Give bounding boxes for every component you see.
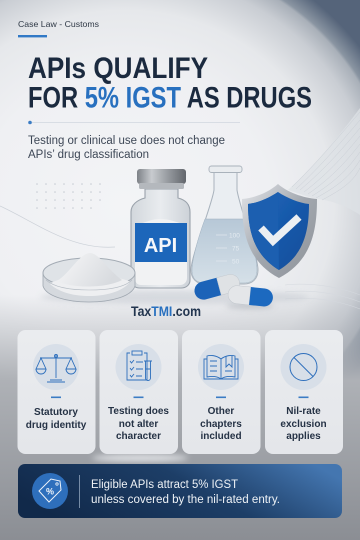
panel: statutory drug identity: Statutory	[34, 407, 78, 418]
panel: nil-rate exclusion applies: Nil-rate	[286, 406, 321, 417]
flask with liquid	[191, 166, 258, 284]
callout text	[91, 479, 280, 506]
panel: nil-rate exclusion applies: exclusion	[280, 419, 327, 430]
category tag	[18, 19, 99, 37]
brand: TaxTMI.com: TaxTMI.com	[131, 304, 201, 319]
panel: testing does not alter character: Testing does	[108, 406, 169, 417]
panel: nil-rate exclusion applies	[265, 330, 343, 454]
petri dish with powder	[43, 253, 135, 302]
subtitle	[28, 135, 225, 161]
subtitle: APIs’ drug classification	[28, 149, 149, 161]
icon: scales	[36, 354, 76, 382]
subtitle: Testing or clinical use does not change	[28, 135, 225, 147]
panel: statutory drug identity	[18, 330, 96, 454]
panel: testing does not alter character	[100, 330, 178, 454]
panel: testing does not alter character: not alter	[119, 419, 158, 430]
flask with liquid: 75	[232, 246, 240, 252]
vial with API label: API	[144, 235, 177, 257]
panel: other chapters included: Other	[208, 406, 234, 417]
panel: other chapters included: included	[200, 431, 242, 442]
icon: percent tag: %	[46, 486, 54, 496]
panel: testing does not alter character: character	[116, 431, 161, 442]
flask with liquid: 100	[229, 232, 240, 240]
category tag: Case Law - Customs	[18, 19, 99, 29]
blue and white capsules	[192, 272, 274, 309]
shield with check	[242, 184, 317, 278]
panel: other chapters included	[182, 330, 260, 454]
vial with API label	[131, 169, 190, 288]
callout banner	[18, 464, 342, 518]
title	[28, 52, 312, 114]
panel: other chapters included: chapters	[200, 419, 242, 430]
icon: open book	[204, 355, 238, 379]
flask with liquid: 50	[232, 258, 240, 266]
title: APIs QUALIFY	[28, 52, 208, 85]
icon: clipboard and test tube	[127, 351, 152, 380]
title divider	[28, 121, 240, 124]
illustration: API products	[40, 166, 317, 309]
callout text: unless covered by the nil-rated entry.	[91, 494, 280, 506]
title: FOR 5% IGST AS DRUGS	[28, 82, 312, 114]
icon: prohibition sign	[290, 354, 317, 380]
icon: percent tag	[32, 473, 68, 509]
panel: nil-rate exclusion applies: applies	[286, 431, 321, 442]
callout text: Eligible APIs attract 5% IGST	[91, 479, 238, 491]
panel: statutory drug identity: drug identity	[26, 420, 87, 431]
glow under cards	[92, 454, 188, 462]
